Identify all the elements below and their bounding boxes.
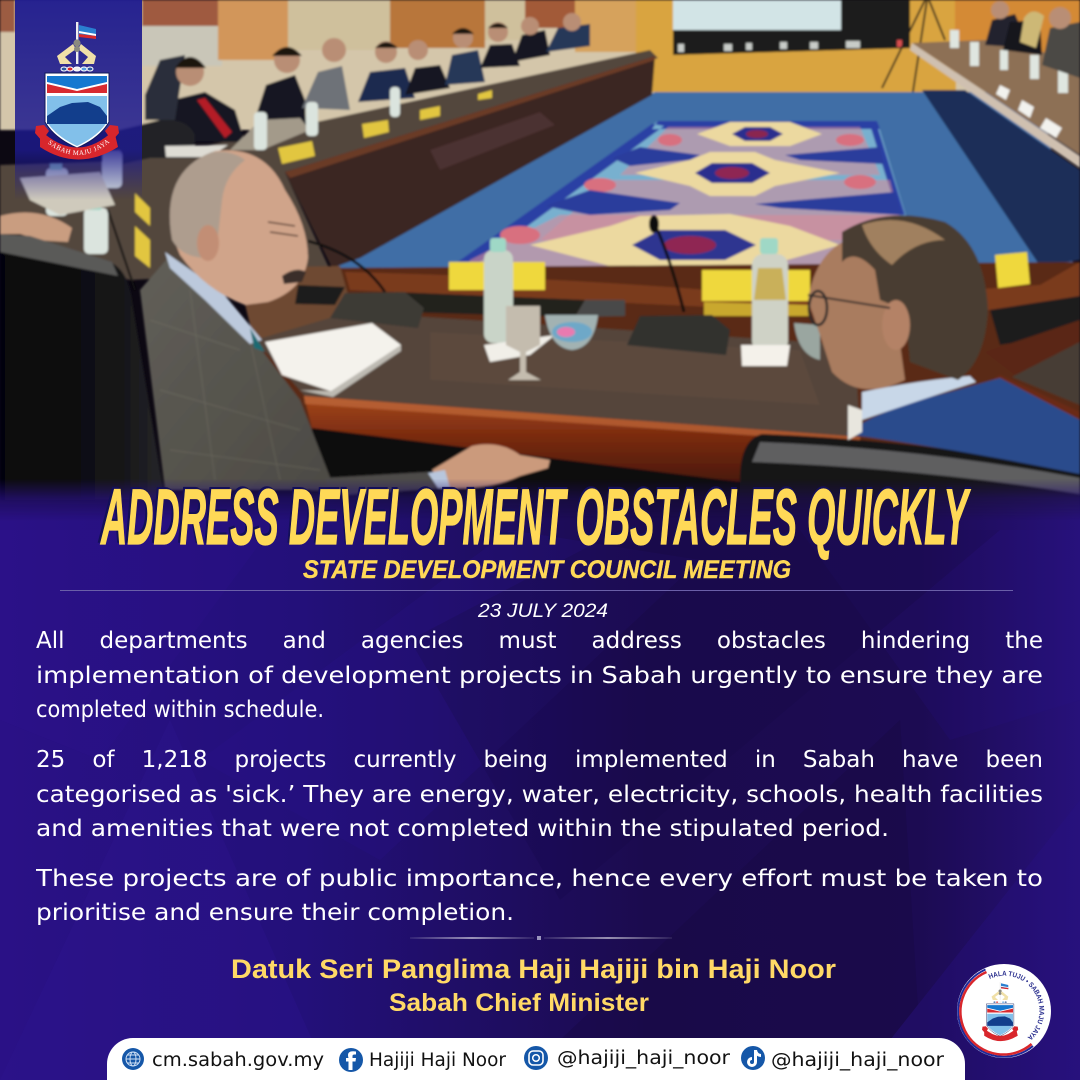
paragraph 2: 25 of 1,218 projects currently being implemented in Sabah have been [36,747,1043,773]
instagram handle: @hajiji_haji_noor [557,1048,730,1069]
crest: Sabah coat of arms [35,22,119,160]
left man head [171,150,308,305]
speaker name: Datuk Seri Panglima Haji Hajiji bin Haji Noor [231,954,837,984]
name plates front [449,262,545,290]
paragraph 2: categorised as 'sick.’ They are energy, water, electricity, schools, health facilities [36,782,1043,808]
name plates back [135,90,492,268]
geometric shards [450,530,1018,1080]
subtitle: STATE DEVELOPMENT COUNCIL MEETING [303,556,791,584]
paragraph 3: These projects are of public importance, hence every effort must be taken to [36,866,1043,892]
tripod [882,0,945,98]
paragraph 2 [36,747,1043,842]
date: 23 JULY 2024 [477,601,608,622]
bottles and glass [484,250,513,343]
paragraph 2: and amenities that were not completed within the stipulated period. [36,816,889,842]
icon: tiktok [741,1046,765,1070]
icon: instagram [524,1046,548,1070]
blue logo banner [15,0,142,200]
paragraph 3 [36,866,1043,926]
body text [36,628,1043,926]
chair behind and papers [118,120,195,165]
table surface [255,312,860,437]
facebook name: Hajiji Haji Noor [369,1050,506,1071]
carpet floor [330,92,1080,345]
left man suit [140,258,335,490]
paragraph 1: All departments and agencies must address obstacles hindering the [36,628,1043,654]
rug [439,121,930,295]
papers [265,323,401,392]
foreground table rim [250,262,1080,480]
back row people [145,14,1080,142]
screen [673,0,910,55]
website: cm.sabah.gov.my [152,1050,324,1071]
paragraph 3: prioritise and ensure their completion. [36,900,514,926]
back wall [0,0,1080,560]
icon: website globe [122,1048,144,1070]
crest: Sabah coat of arms: SABAH MAJU JAYA [48,140,110,156]
left man hand [432,444,550,488]
paragraph 1 [36,628,1043,723]
speaker role: Sabah Chief Minister [389,989,649,1017]
right chair [740,434,1080,520]
left long table [0,50,658,280]
paragraph 1: implementation of development projects in Sabah urgently to ensure they are [36,663,1043,689]
tiktok handle: @hajiji_haji_noor [771,1050,944,1071]
lower purple background [0,430,1080,1080]
white contact pill [107,1038,965,1080]
Hala Tuju round logo: HALA TUJU • SABAH MAJU JAYA [988,970,1044,1040]
left chair [0,234,165,500]
icon: facebook [339,1048,363,1072]
microphones [330,292,424,328]
paragraph 1: completed within schedule. [36,697,324,723]
Hala Tuju round logo [957,964,1051,1058]
right man [846,378,1080,474]
right long table [912,40,1080,155]
